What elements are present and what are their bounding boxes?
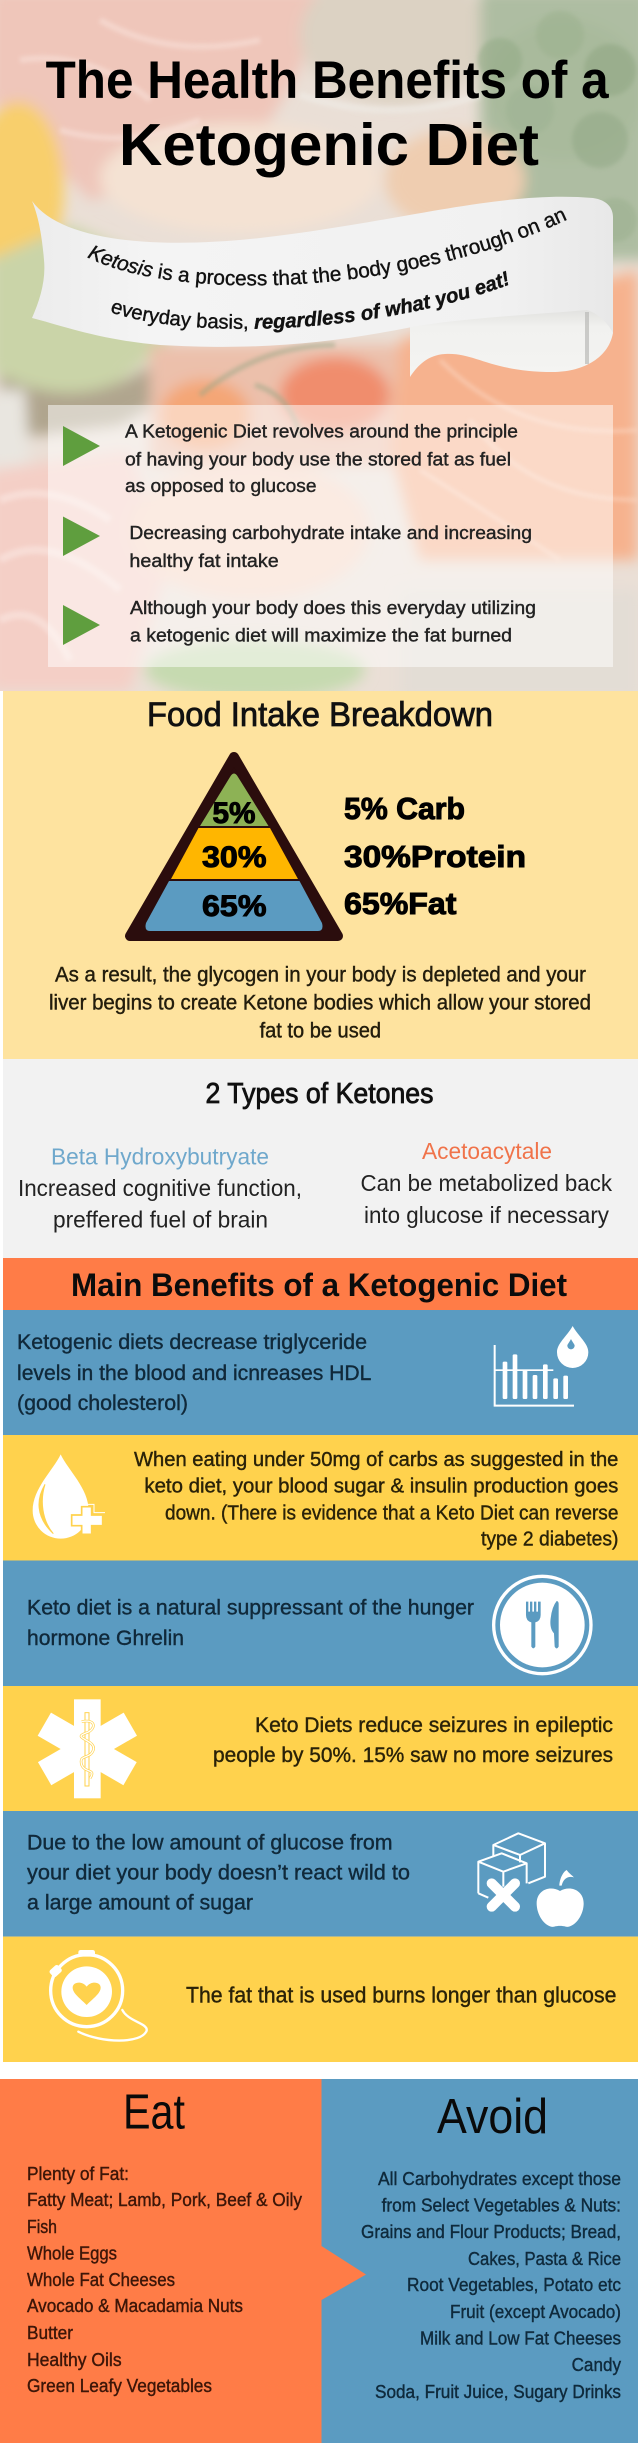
bullet: decrease carbohydrates (63, 516, 532, 571)
ketone: acetoacytale: Acetoacytale (422, 1138, 552, 1164)
bullet: stored fat as fuel (63, 420, 518, 496)
list: foods to avoid: Soda, Fruit Juice, Sugary Drinks (375, 2382, 621, 2402)
heading: food intake breakdown: Food Intake Breakdown (147, 696, 493, 734)
pyramid chart: 5% (212, 797, 256, 830)
list: foods to eat: Whole Fat Cheeses (27, 2270, 175, 2290)
panel: main benefits heading (3, 1258, 638, 1310)
paragraph: glycogen depleted: liver begins to create Ketone bodies which allow your stored (49, 992, 591, 1014)
benefit: blood sugar and insulin (3, 1435, 638, 1560)
panel: eat (0, 2079, 366, 2443)
list: foods to eat (27, 2164, 302, 2396)
title: The Health Benefits of a (46, 51, 609, 110)
icon: drop with plus (33, 1454, 105, 1539)
bullet: maximize fat burned: Although your body does this everyday utilizing (130, 597, 536, 618)
ketone: acetoacytale: Can be metabolized back (360, 1170, 612, 1196)
list: foods to eat: Butter (27, 2323, 73, 2343)
benefit: hunger hormone (3, 1560, 638, 1686)
benefit: glucose reaction: your diet your body doesn’t react wild to (27, 1860, 410, 1884)
list: foods to eat: Plenty of Fat: (27, 2164, 129, 2184)
list: foods to eat: Healthy Oils (27, 2350, 122, 2370)
ketone: beta hydroxybutryate: preffered fuel of brain (53, 1206, 268, 1232)
list: foods to eat: Whole Eggs (27, 2244, 117, 2264)
pyramid chart (130, 757, 338, 936)
benefit: glucose reaction: Due to the low amount of glucose from (27, 1830, 393, 1854)
icon: sugar cubes and apple (478, 1833, 584, 1927)
paragraph: glycogen depleted: As a result, the glycogen in your body is depleted and your (55, 964, 586, 986)
benefit: blood sugar and insulin: When eating under 50mg of carbs as suggested in the (134, 1448, 618, 1471)
benefit: hunger hormone: hormone Ghrelin (27, 1626, 184, 1650)
list: foods to avoid: from Select Vegetables & Nuts: (382, 2196, 621, 2216)
title: Ketogenic Diet (119, 112, 539, 178)
bullet: maximize fat burned: a ketogenic diet will maximize the fat burned (130, 624, 512, 646)
ribbon banner: everyday basis, regardless of what you eat! (112, 270, 508, 332)
list: foods to avoid: All Carbohydrates except those (378, 2169, 621, 2189)
bullet: maximize fat burned (63, 597, 536, 646)
benefit: fat burns longer: The fat that is used burns longer than glucose (186, 1982, 616, 2008)
ketone: acetoacytale (360, 1138, 612, 1228)
bullet: stored fat as fuel: as opposed to glucose (125, 475, 316, 496)
panel: main benefits heading: Main Benefits of a Ketogenic Diet (71, 1267, 567, 1303)
semi-transparent text panel (48, 405, 613, 667)
bullet: stored fat as fuel: A Ketogenic Diet revolves around the principle (125, 420, 518, 442)
benefit: seizures: Keto Diets reduce seizures in epileptic (255, 1713, 613, 1737)
bullet: stored fat as fuel: of having your body use the stored fat as fuel (125, 448, 511, 470)
benefit: fat burns longer (3, 1937, 638, 2062)
list: foods to avoid: Grains and Flour Products; Bread, (361, 2222, 621, 2242)
legend: macro percentages: 65%Fat (344, 886, 456, 921)
legend: macro percentages: 5% Carb (344, 791, 465, 826)
ketone: beta hydroxybutryate (18, 1144, 302, 1232)
ketone: beta hydroxybutryate: Beta Hydroxybutryate (51, 1144, 269, 1170)
benefit: blood sugar and insulin: keto diet, your blood sugar & insulin production goes (144, 1474, 618, 1498)
bullet: decrease carbohydrates: healthy fat intake (129, 550, 279, 571)
list: foods to eat: Fatty Meat; Lamb, Pork, Beef & Oily (27, 2190, 302, 2210)
list: foods to avoid: Root Vegetables, Potato etc (407, 2275, 621, 2295)
benefit: triglycerides (3, 1310, 638, 1435)
list: foods to avoid: Fruit (except Avocado) (450, 2302, 621, 2322)
panel: food intake breakdown (3, 691, 638, 1059)
pyramid chart: 30% (202, 841, 266, 874)
heading: 2 types of ketones: 2 Types of Ketones (206, 1078, 434, 1110)
benefit: triglycerides: levels in the blood and icnreases HDL (17, 1361, 371, 1385)
benefit: hunger hormone: Keto diet is a natural suppressant of the hunger (27, 1596, 474, 1620)
heading: eat: Eat (123, 2086, 185, 2140)
ribbon banner (32, 196, 613, 377)
benefit: glucose reaction: a large amount of sugar (27, 1890, 253, 1914)
benefit: triglycerides: Ketogenic diets decrease triglyceride (17, 1330, 367, 1354)
benefit: triglycerides: (good cholesterol) (17, 1391, 188, 1415)
benefit: glucose reaction (3, 1811, 638, 1937)
icon: plate with fork and knife (494, 1576, 591, 1674)
bullet: decrease carbohydrates: Decreasing carbohydrate intake and increasing (129, 522, 532, 543)
benefit: blood sugar and insulin: type 2 diabetes) (481, 1528, 618, 1550)
legend: macro percentages: 30%Protein (344, 839, 526, 874)
list: foods to avoid: Candy (572, 2355, 621, 2375)
heading: avoid: Avoid (437, 2090, 548, 2144)
list: foods to eat: Fish (27, 2217, 57, 2237)
list: foods to avoid (361, 2169, 621, 2402)
list: foods to avoid: Cakes, Pasta & Rice (468, 2249, 621, 2269)
benefit: seizures (3, 1686, 638, 1811)
icon: star of life (38, 1699, 137, 1798)
list: foods to avoid: Milk and Low Fat Cheeses (420, 2328, 621, 2348)
ketone: beta hydroxybutryate: Increased cognitive function, (18, 1175, 302, 1201)
legend: macro percentages (344, 791, 526, 921)
panel: avoid (321, 2079, 638, 2443)
ribbon banner: Ketosis is a process that the body goes through on an (87, 210, 567, 288)
panel: 2 types of ketones (3, 1059, 638, 1258)
hero photo background: keto foods (0, 0, 638, 700)
benefit: seizures: people by 50%. 15% saw no more seizures (213, 1743, 613, 1767)
icon: stopwatch with heart (49, 1950, 147, 2041)
paragraph: glycogen depleted (49, 964, 591, 1042)
paragraph: glycogen depleted: fat to be used (260, 1020, 381, 1042)
list: foods to eat: Avocado & Macadamia Nuts (27, 2296, 243, 2316)
list: foods to eat: Green Leafy Vegetables (27, 2376, 212, 2396)
pyramid chart: 65% (202, 890, 266, 923)
icon: chart with blood drop (495, 1326, 588, 1406)
ketone: acetoacytale: into glucose if necessary (364, 1202, 609, 1228)
title (46, 51, 609, 178)
